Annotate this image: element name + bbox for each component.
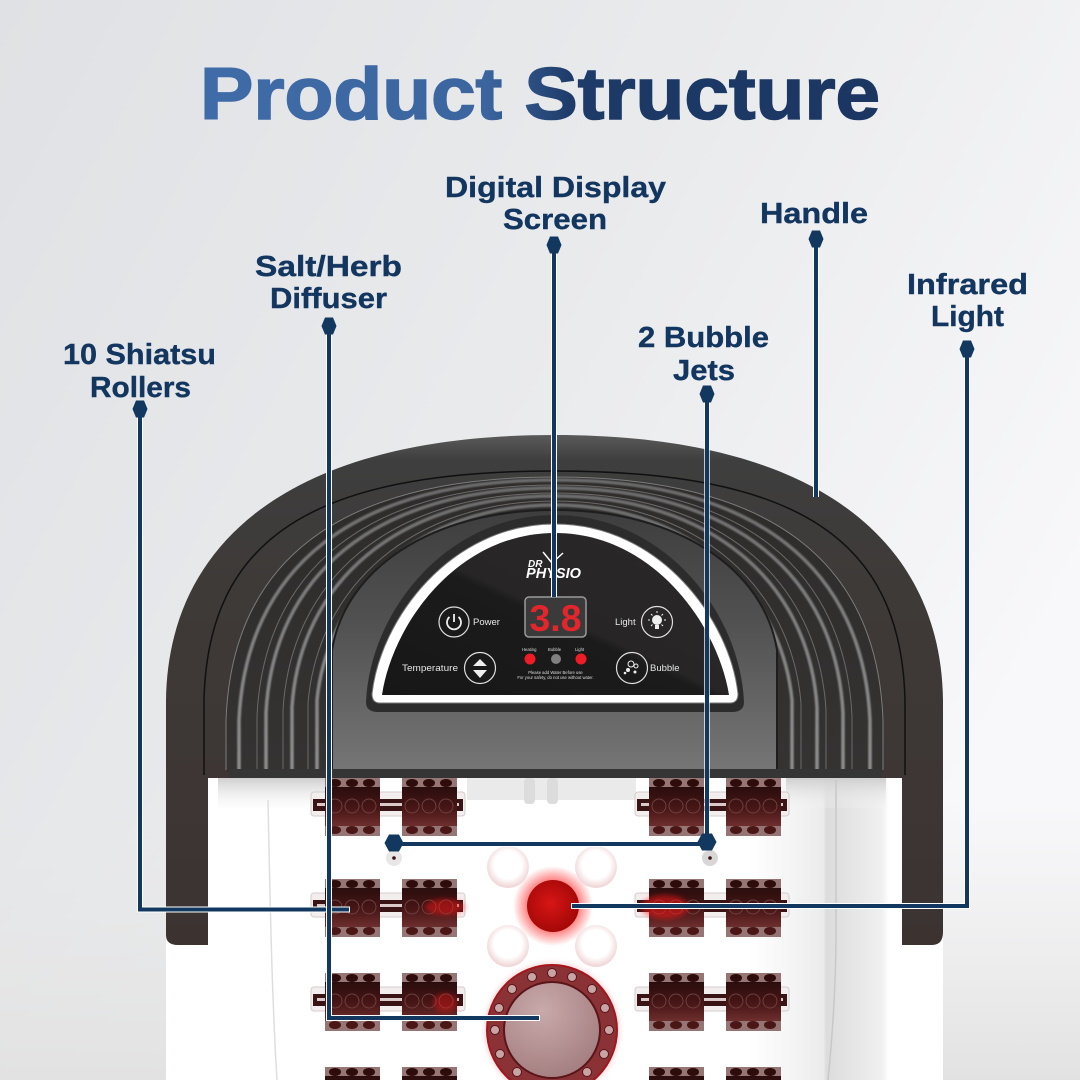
brand logo — [526, 552, 581, 584]
tub interior — [207, 770, 903, 1080]
label: 10 Shiatsu Rollers: 10 Shiatsu — [63, 339, 216, 371]
indicator lights: For your safety, do not use without water. — [517, 675, 594, 680]
tub lower body — [166, 930, 943, 1080]
salt and herb diffuser disc — [484, 962, 620, 1080]
bubble button — [616, 652, 680, 684]
control panel white rim — [372, 524, 738, 703]
callout line: Digital Display Screen — [546, 236, 562, 597]
centre housing — [332, 510, 777, 772]
callout line: Salt/Herb Diffuser — [322, 318, 540, 1018]
indicator lights: Light — [575, 647, 585, 652]
label: 10 Shiatsu Rollers: Rollers — [90, 372, 191, 404]
indicator lights: Bubble — [548, 647, 562, 652]
product: foot spa — [166, 435, 943, 1080]
label: Salt/Herb Diffuser: Diffuser — [270, 283, 387, 315]
upper tub clips — [467, 778, 636, 804]
handle shell — [166, 435, 943, 945]
callout line: Handle — [808, 230, 824, 497]
handle contour line — [204, 471, 905, 775]
temperature button: Temperature — [402, 663, 458, 674]
label: Infrared Light — [907, 269, 1028, 333]
indicator lights: Please add Water Before use — [528, 670, 583, 675]
callout line: Infrared Light — [571, 340, 974, 906]
label: 10 Shiatsu Rollers — [63, 339, 216, 404]
label: Salt/Herb Diffuser: Salt/Herb — [255, 251, 402, 283]
label: Salt/Herb Diffuser — [255, 251, 402, 315]
control panel face — [382, 533, 729, 695]
infrared light and massage balls — [487, 846, 617, 967]
label: Infrared Light: Infrared — [907, 269, 1028, 301]
label: 2 Bubble Jets — [638, 322, 769, 387]
label: 2 Bubble Jets: Jets — [673, 355, 735, 387]
label: Digital Display Screen: Screen — [503, 204, 607, 236]
power button — [439, 607, 500, 637]
digital display: 3.8 — [530, 598, 582, 639]
power button: Power — [473, 617, 500, 628]
label: Digital Display Screen — [445, 172, 666, 236]
label: Handle: Handle — [760, 198, 868, 230]
label: 2 Bubble Jets: 2 Bubble — [638, 322, 769, 354]
title: Product Structure — [200, 54, 880, 135]
bottom ledge — [229, 769, 881, 778]
brand logo: DR — [528, 559, 543, 570]
ribbed section — [226, 477, 883, 772]
brand logo: PHYSIO — [526, 565, 581, 582]
control panel bezel — [366, 515, 744, 712]
light button: Light — [615, 617, 636, 628]
label: Infrared Light: Light — [931, 301, 1004, 333]
callout line: 2 Bubble Jets — [384, 386, 716, 852]
shiatsu rollers — [311, 778, 789, 1080]
indicator lights: Heating — [522, 647, 537, 652]
label: Digital Display Screen: Digital Display — [445, 172, 666, 204]
callout line: 10 Shiatsu Rollers — [132, 400, 350, 910]
temperature button — [402, 652, 496, 684]
bubble jets — [386, 850, 718, 866]
light button — [615, 606, 672, 638]
bubble button: Bubble — [650, 663, 680, 674]
indicator lights — [517, 647, 594, 680]
